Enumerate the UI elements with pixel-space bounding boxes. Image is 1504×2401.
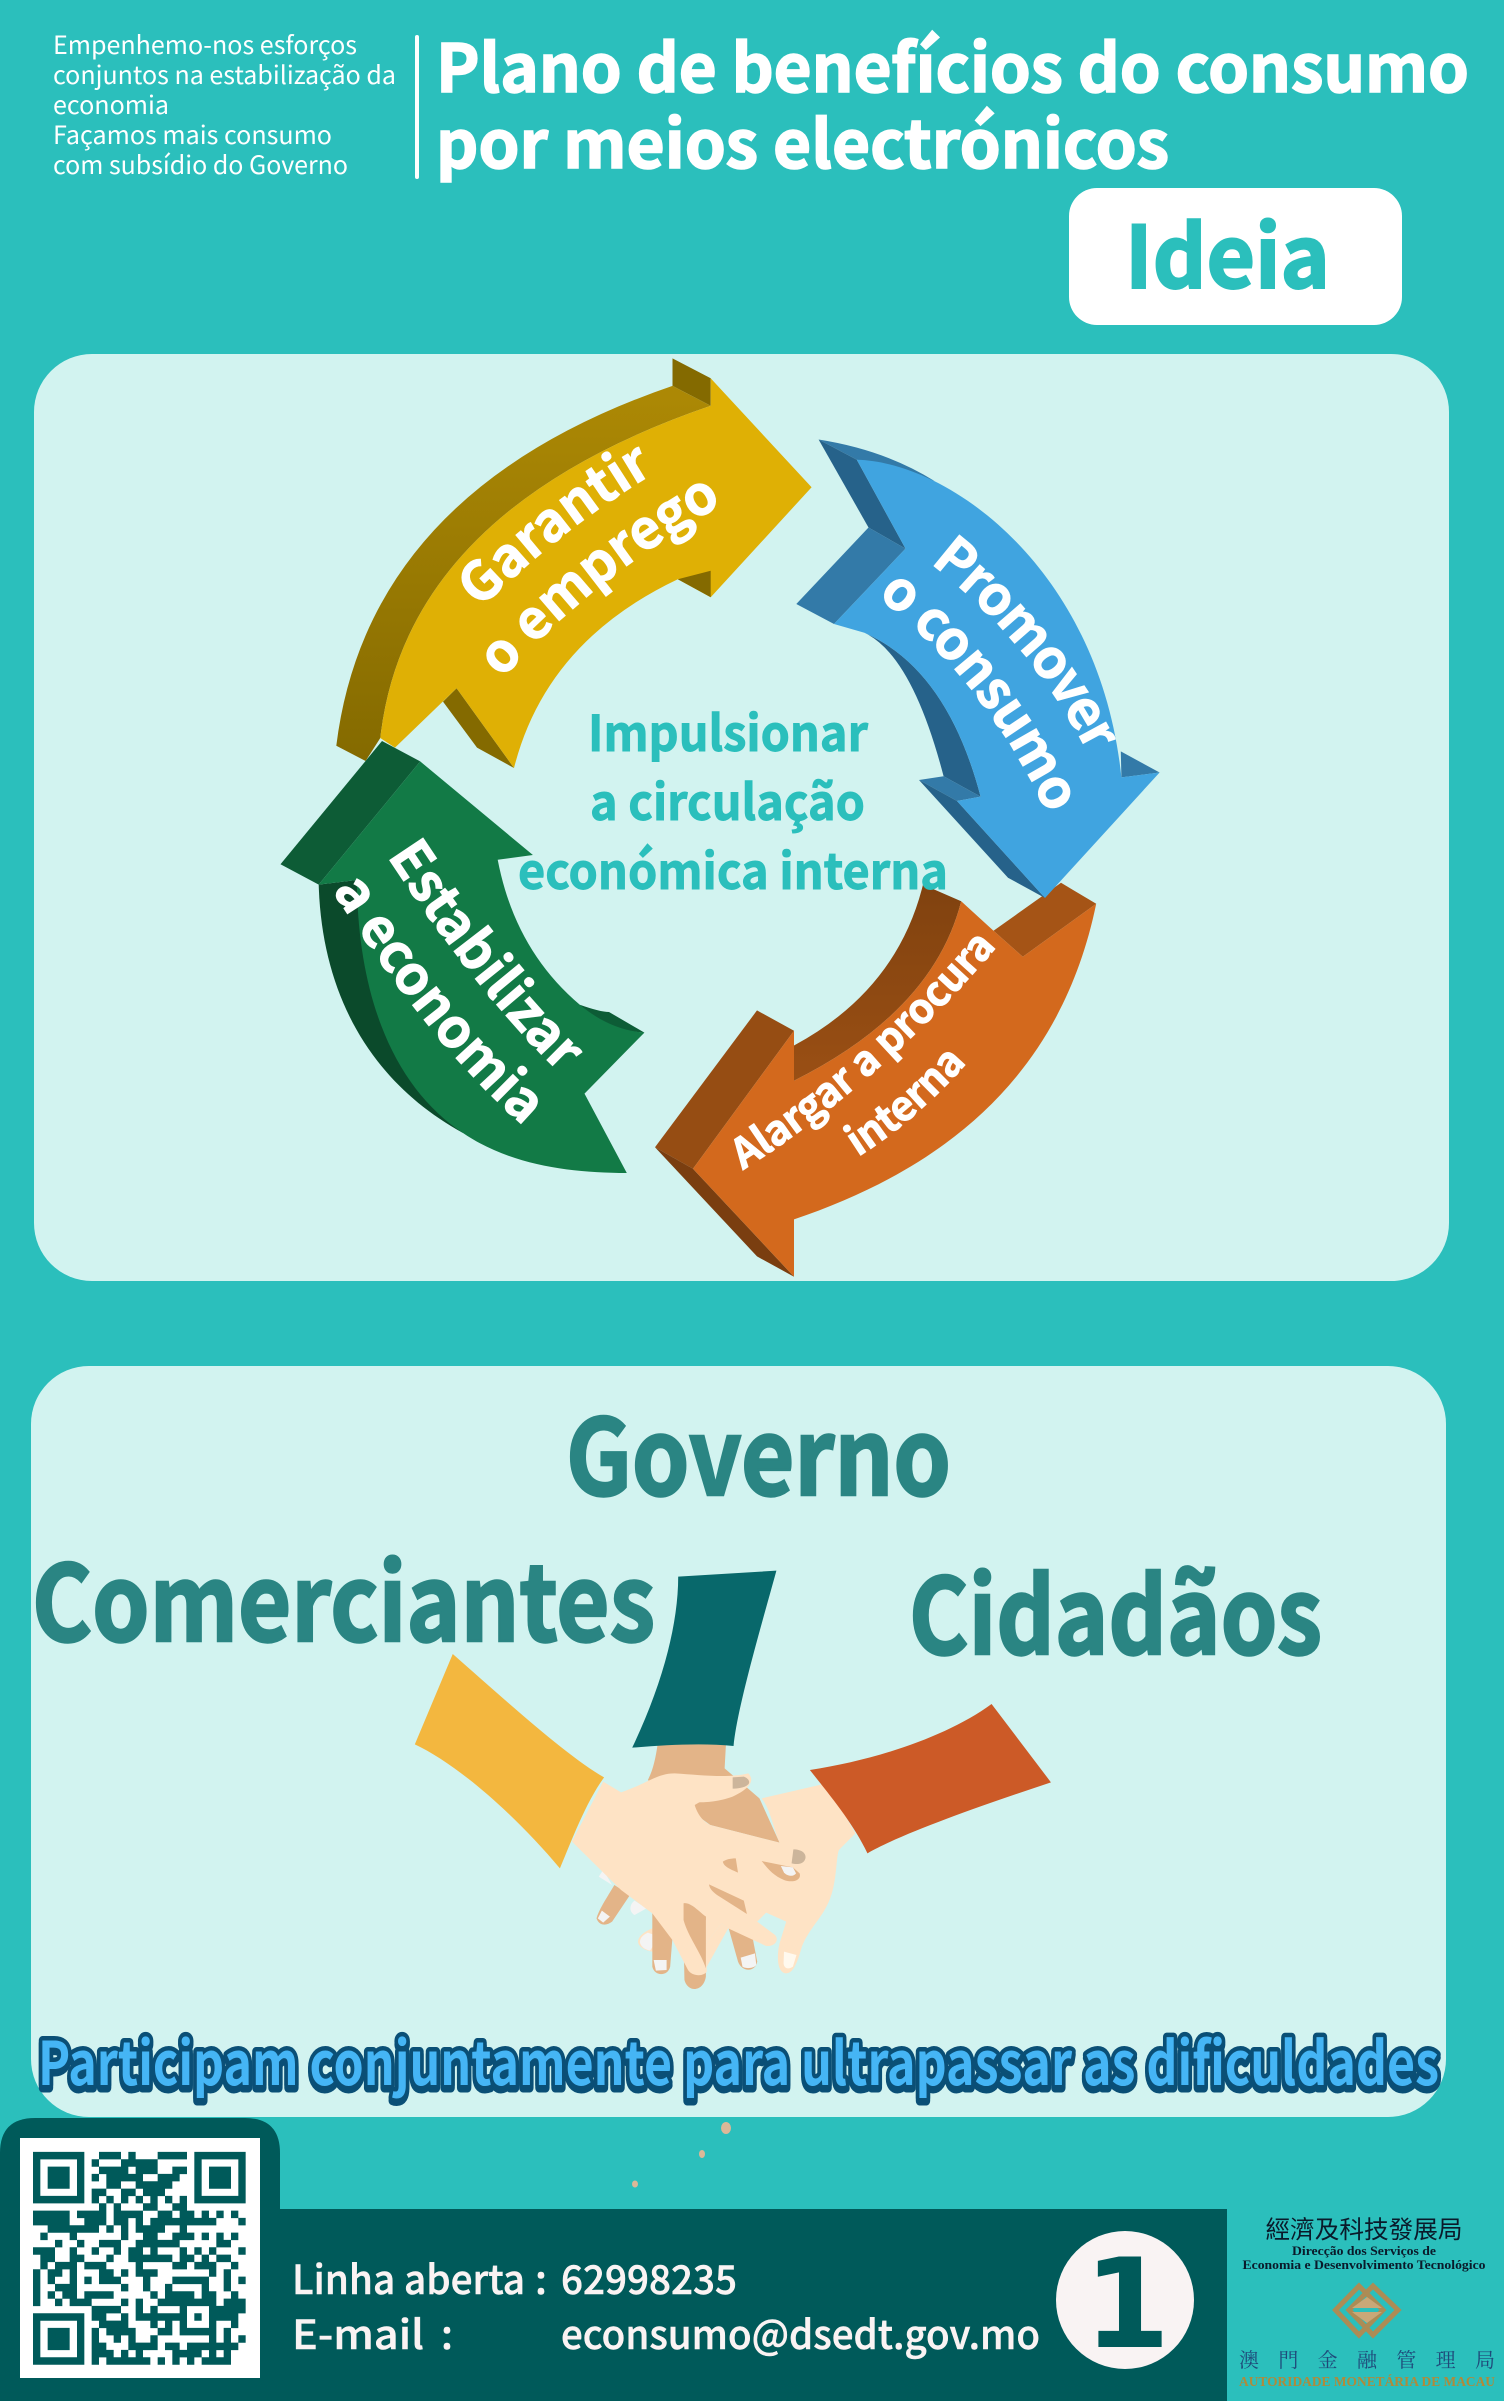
label: Governo: Governo	[566, 1374, 951, 1526]
label: Garantir o emprego: o emprego	[486, 483, 716, 672]
contact details: E-mail	[292, 2303, 424, 2361]
header slogan: Façamos mais consumo	[53, 116, 332, 152]
title	[436, 16, 1469, 188]
upper forearm	[648, 1744, 780, 1843]
label: Estabilizar a economia: a economia	[336, 878, 538, 1124]
label: Garantir o emprego: Garantir	[461, 446, 646, 600]
contact details: :	[535, 2248, 547, 2306]
contact details: :	[441, 2303, 453, 2361]
cream hands	[572, 1773, 855, 1975]
label: Alargar a procura interna: interna	[842, 1052, 966, 1156]
label: Promover o consumo: Promover	[934, 534, 1116, 744]
illustration: joined hands	[415, 1571, 1051, 1989]
page number badge	[1056, 2231, 1194, 2377]
lower fingers behind	[597, 1885, 630, 1925]
logo: DSEDT: Direcção dos Serviços de	[1292, 2244, 1436, 2258]
logo: AMCM emblem	[1336, 2286, 1398, 2335]
centre text: a circulação	[590, 764, 865, 835]
QR tab	[0, 2118, 280, 2401]
header divider	[415, 35, 419, 179]
arrow: Garantir o emprego	[336, 358, 812, 768]
stray droplets	[632, 2122, 731, 2188]
centre text: Impulsionar	[588, 695, 869, 766]
logo: DSEDT: 經濟及科技發展局	[1266, 2210, 1462, 2246]
thumb nails	[733, 1777, 749, 1789]
centre text	[518, 695, 948, 904]
header slogan: Empenhemo-nos esforços	[53, 26, 357, 62]
arrow: Alargar a procura interna	[655, 883, 1096, 1277]
centre text: económica interna	[518, 833, 948, 904]
panel: participants	[31, 1366, 1446, 2117]
badge: Ideia: Ideia	[1125, 188, 1330, 313]
logo: DSEDT	[1242, 2210, 1486, 2272]
sleeve: orange	[810, 1704, 1051, 1853]
QR code	[33, 2156, 246, 2361]
contact details: 62998235	[561, 2248, 737, 2306]
header slogan: economia	[53, 86, 169, 122]
arrow: Promover o consumo	[796, 440, 1160, 898]
label: Promover o consumo: o consumo	[884, 579, 1070, 808]
logo: AMCM name: AUTORIDADE MONETÁRIA DE MACAU	[1239, 2374, 1495, 2389]
header slogan	[53, 26, 396, 182]
label: Alargar a procura interna: Alargar a procura	[734, 936, 996, 1171]
contact details: Linha aberta	[292, 2248, 525, 2306]
contact details: econsumo@dsedt.gov.mo	[561, 2303, 1040, 2361]
label: Comerciantes: Comerciantes	[32, 1520, 655, 1672]
header slogan: com subsídio do Governo	[53, 146, 348, 182]
title: por meios electrónicos	[436, 92, 1169, 188]
page number badge: 1	[1084, 2233, 1170, 2377]
header slogan: conjuntos na estabilização da	[53, 56, 396, 92]
arrow: Estabilizar a economia	[280, 741, 644, 1173]
contact details	[292, 2248, 1040, 2361]
label: Cidadãos: Cidadãos	[909, 1533, 1322, 1685]
finger gaps	[684, 1903, 706, 1968]
logo: DSEDT: Economia e Desenvolvimento Tecnológico	[1242, 2258, 1486, 2272]
logo: AMCM name: 澳門金融管理局	[1239, 2344, 1495, 2373]
title: Plano de benefícios do consumo	[436, 16, 1469, 112]
logo: AMCM name	[1239, 2344, 1495, 2389]
badge: Ideia	[1069, 188, 1402, 325]
sleeve: yellow	[415, 1654, 604, 1868]
label: Estabilizar a economia: Estabilizar	[389, 837, 582, 1066]
sleeve: teal	[632, 1571, 776, 1748]
panel: cycle diagram	[34, 354, 1449, 1281]
footer band	[0, 2209, 1227, 2401]
